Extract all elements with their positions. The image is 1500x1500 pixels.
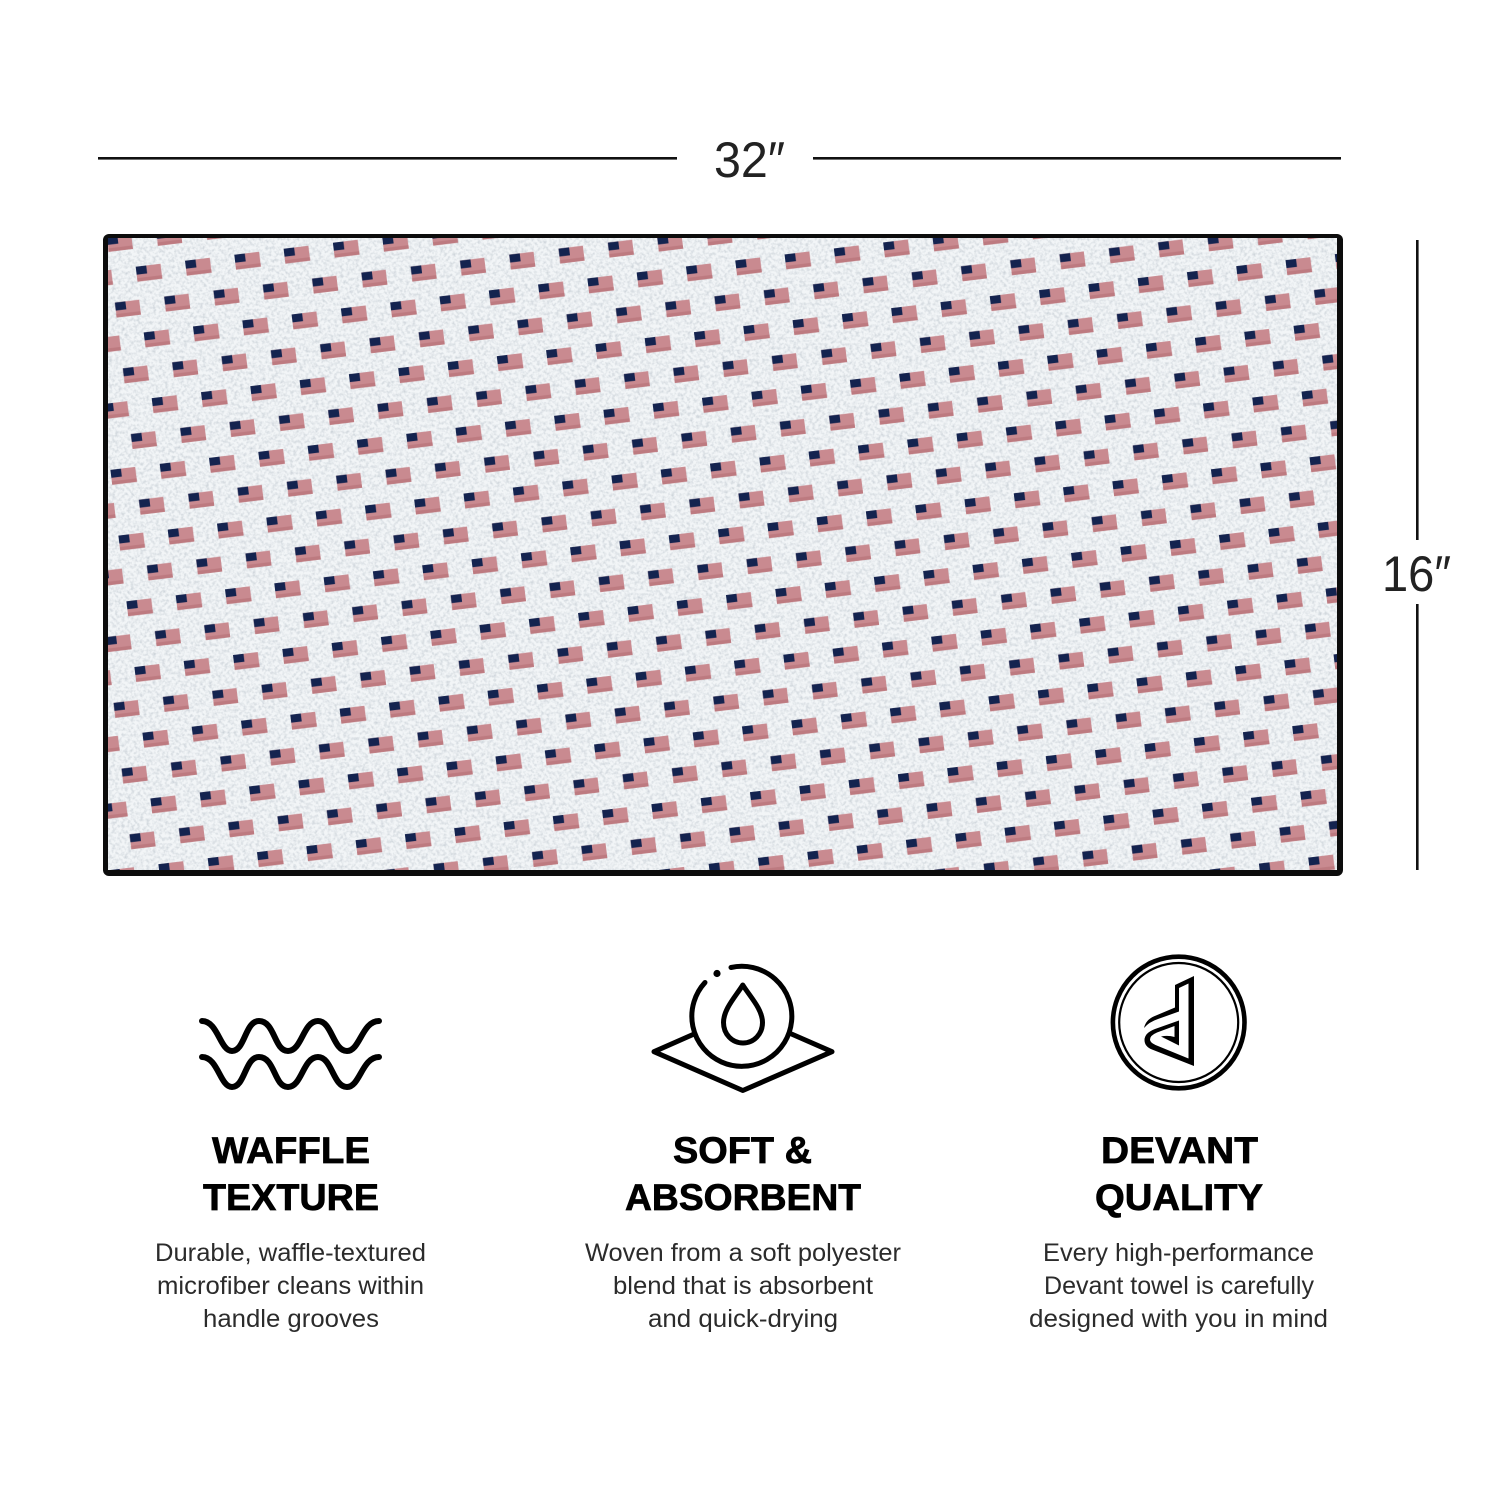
text: waffle texture description: handle grooves <box>203 1305 379 1333</box>
text: waffle texture description <box>155 1239 426 1333</box>
height dimension: 16 inches: 16″ <box>1382 546 1451 602</box>
feature: soft and absorbent <box>585 966 901 1333</box>
text: devant quality description: Every high-performance <box>1043 1239 1314 1267</box>
icon: waves <box>202 1021 379 1087</box>
text: soft and absorbent description: and quick-drying <box>648 1305 838 1333</box>
heading: soft and absorbent: ABSORBENT <box>625 1177 861 1218</box>
feature: devant quality <box>1029 957 1328 1333</box>
heading: devant quality: QUALITY <box>1095 1177 1263 1218</box>
text: devant quality description: Devant towel is carefully <box>1044 1272 1314 1300</box>
text: soft and absorbent description: blend that is absorbent <box>613 1272 873 1300</box>
text: soft and absorbent description: Woven from a soft polyester <box>585 1239 901 1267</box>
heading: waffle texture <box>203 1130 379 1218</box>
heading: devant quality: DEVANT <box>1101 1130 1258 1171</box>
heading: waffle texture: WAFFLE <box>212 1130 370 1171</box>
icon: devant logo badge <box>1113 957 1244 1088</box>
text: soft and absorbent description <box>585 1239 901 1333</box>
heading: soft and absorbent: SOFT & <box>673 1130 812 1171</box>
heading: soft and absorbent <box>625 1130 861 1218</box>
heading: devant quality <box>1095 1130 1263 1218</box>
icon: water drop on cloth <box>654 966 832 1090</box>
heading: waffle texture: TEXTURE <box>203 1177 379 1218</box>
towel with flag pattern <box>103 234 1343 876</box>
text: devant quality description <box>1029 1239 1328 1333</box>
width dimension: 32 inches: 32″ <box>714 132 785 188</box>
text: devant quality description: designed with you in mind <box>1029 1305 1328 1333</box>
feature: waffle texture <box>155 1021 426 1333</box>
text: waffle texture description: Durable, waffle-textured <box>155 1239 426 1267</box>
text: waffle texture description: microfiber cleans within <box>157 1272 424 1300</box>
